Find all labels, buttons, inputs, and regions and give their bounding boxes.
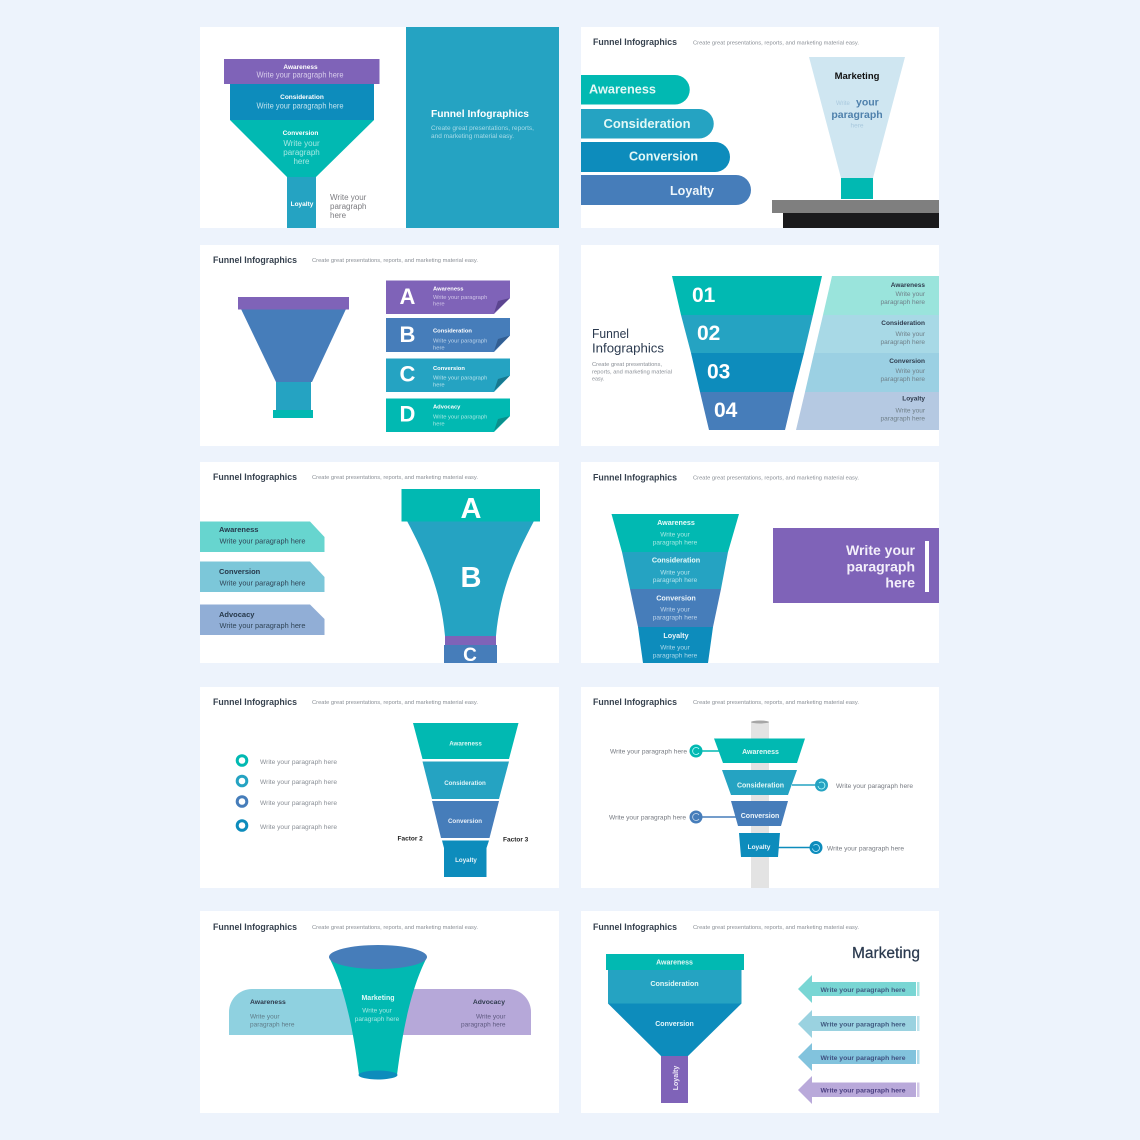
heading: Funnel Infographics <box>593 697 677 708</box>
funnel band 04 <box>700 392 794 430</box>
funnel band: loyalty: paragraph here <box>653 652 698 660</box>
callout: loyalty <box>778 841 904 854</box>
arrow 3 <box>798 1043 920 1071</box>
band: advocacy: Advocacy <box>473 999 505 1006</box>
arrow 1: Write your paragraph here <box>820 987 906 994</box>
card B <box>386 318 510 352</box>
funnel body: Write your <box>362 1008 393 1014</box>
label band: consideration <box>814 315 939 353</box>
label band: loyalty: paragraph here <box>881 416 925 422</box>
funnel band 04: 04 <box>714 399 738 422</box>
funnel tier: consideration <box>608 970 742 1004</box>
funnel band: loyalty: Write your <box>660 644 691 652</box>
heading <box>213 697 478 708</box>
card D: D <box>400 402 415 426</box>
panel: slide 3 funnel with ribbon cards <box>200 245 559 446</box>
funnel tier: consideration: Consideration <box>280 94 324 101</box>
spotlight funnel: paragraph <box>831 109 883 121</box>
heading <box>213 922 478 933</box>
card A <box>386 280 510 314</box>
funnel tier: conversion: Conversion <box>655 1021 694 1028</box>
funnel tier: awareness <box>606 954 744 970</box>
funnel band: conversion: paragraph here <box>653 614 698 622</box>
spotlight funnel: here <box>850 122 864 130</box>
title: marketing: Marketing <box>852 945 920 962</box>
band: awareness: Write your <box>250 1014 280 1020</box>
panel: slide 6 funnel with purple callout <box>581 462 939 663</box>
funnel base C: C <box>463 645 477 666</box>
funnel tier: consideration: Write your paragraph here <box>256 102 344 110</box>
side title panel <box>406 27 559 228</box>
pill: loyalty: Loyalty <box>670 183 715 198</box>
arrow 4 <box>798 1076 920 1104</box>
label band: consideration: Consideration <box>881 320 925 327</box>
funnel band 02 <box>681 315 813 353</box>
arrow 3: Write your paragraph here <box>820 1055 906 1062</box>
card C: C <box>400 362 416 386</box>
text block: loyalty note <box>330 193 367 220</box>
card D: Write your paragraph <box>433 414 487 420</box>
funnel tier: loyalty <box>287 177 316 228</box>
text block: loyalty note: Write your <box>330 193 367 202</box>
label band: consideration: Write your <box>896 331 926 338</box>
funnel tier: awareness: Awareness <box>449 740 482 748</box>
label band: conversion <box>805 353 939 392</box>
card A: here <box>433 302 445 308</box>
funnel tier: awareness: Write your paragraph here <box>256 70 344 80</box>
heading: Funnel Infographics <box>213 697 297 708</box>
funnel tier: consideration: Consideration <box>444 780 486 787</box>
pole <box>751 720 769 888</box>
callout: consideration <box>792 778 913 792</box>
spotlight funnel <box>809 57 905 178</box>
heading: Create great presentations, reports, and marketing material easy. <box>693 40 859 46</box>
tag: conversion: Write your paragraph here <box>220 580 306 588</box>
arrow 2 <box>798 1010 920 1038</box>
panel: slide 7 bullets and segmented funnel <box>200 687 559 888</box>
funnel band: conversion <box>630 589 721 627</box>
heading <box>593 697 859 708</box>
label band: awareness: Awareness <box>891 282 925 289</box>
bullet list: Write your paragraph here <box>260 824 337 831</box>
tag: awareness: Write your paragraph here <box>220 538 306 546</box>
callout: loyalty: Write your paragraph here <box>827 846 904 852</box>
teal funnel base <box>841 178 873 199</box>
heading: Funnel Infographics <box>213 255 297 266</box>
tier: conversion <box>731 801 788 826</box>
funnel band: conversion: Conversion <box>656 594 696 602</box>
bullet list: Write your paragraph here <box>260 759 337 766</box>
band: advocacy <box>400 989 531 1035</box>
card B: B <box>400 322 415 347</box>
card A: Write your paragraph <box>433 295 487 301</box>
arrow 4: Write your paragraph here <box>820 1088 906 1094</box>
label: factor 3: Factor 3 <box>503 836 529 844</box>
panel: slide 1 funnel with side title <box>200 27 559 228</box>
funnel tier: loyalty: Loyalty <box>673 1066 680 1090</box>
heading block: Create great presentations, <box>592 362 662 368</box>
pill: loyalty <box>581 175 751 205</box>
label band: conversion: Conversion <box>889 358 925 365</box>
card B: Write your paragraph <box>433 338 487 344</box>
funnel band 01: 01 <box>692 284 716 307</box>
heading: Create great presentations, reports, and marketing material easy. <box>693 476 859 482</box>
heading block: reports, and marketing material <box>592 370 672 376</box>
heading: Create great presentations, reports, and marketing material easy. <box>312 475 478 481</box>
purple callout: here <box>885 574 915 590</box>
heading block: Infographics <box>592 340 665 356</box>
tier: loyalty <box>739 833 780 857</box>
heading <box>213 255 478 266</box>
arrow 1 <box>798 975 920 1003</box>
card A: A <box>400 284 416 309</box>
tag: advocacy: Write your paragraph here <box>220 623 306 630</box>
tier: awareness: Awareness <box>742 749 779 756</box>
pill: conversion <box>581 142 730 172</box>
card B: Consideration <box>433 328 472 334</box>
funnel tier: conversion <box>608 1004 742 1056</box>
funnel top A: A <box>461 493 482 525</box>
funnel band: conversion: Write your <box>660 606 691 614</box>
tag: awareness: Awareness <box>219 525 258 534</box>
funnel bottom opening <box>358 1070 398 1080</box>
label band: awareness: paragraph here <box>881 299 925 306</box>
funnel band 03: 03 <box>707 360 730 384</box>
funnel band: awareness: paragraph here <box>653 540 698 546</box>
label band: conversion: paragraph here <box>881 376 925 383</box>
funnel band: awareness: Awareness <box>657 518 695 527</box>
funnel body <box>329 957 427 1075</box>
card C: Write your paragraph <box>433 376 487 382</box>
heading: Create great presentations, reports, and marketing material easy. <box>312 258 478 264</box>
heading: Funnel Infographics <box>593 37 677 48</box>
spotlight funnel: Write <box>836 101 851 107</box>
purple callout <box>773 528 939 603</box>
heading block <box>592 326 672 382</box>
label band: conversion: Write your <box>896 368 926 375</box>
callout: awareness <box>610 744 722 758</box>
funnel band: loyalty <box>638 627 713 663</box>
heading <box>213 472 478 483</box>
callout: awareness: Write your paragraph here <box>610 748 687 756</box>
heading: Funnel Infographics <box>593 922 677 933</box>
funnel band: awareness <box>612 514 739 552</box>
tag: awareness <box>200 522 324 552</box>
arrow 2: Write your paragraph here <box>820 1022 906 1028</box>
funnel band: consideration: paragraph here <box>653 577 698 584</box>
funnel band 03 <box>691 353 804 392</box>
funnel tier: conversion: Conversion <box>448 818 482 825</box>
funnel band 01 <box>672 276 822 315</box>
label band: loyalty: Loyalty <box>902 396 925 402</box>
spotlight funnel: your <box>856 96 879 108</box>
funnel body: paragraph here <box>355 1016 400 1023</box>
bullet list: Write your paragraph here <box>260 779 337 786</box>
funnel tier: loyalty: Loyalty <box>291 201 314 208</box>
heading: Funnel Infographics <box>213 922 297 933</box>
card D: here <box>433 422 445 428</box>
spotlight funnel: Marketing <box>835 71 880 82</box>
funnel band: consideration: Write your <box>660 570 691 576</box>
funnel tier: conversion <box>432 801 499 838</box>
funnel tier: awareness: Awareness <box>656 960 693 966</box>
funnel band 02: 02 <box>697 322 720 345</box>
card C: here <box>433 382 445 388</box>
purple callout: paragraph <box>847 558 915 574</box>
card D: Advocacy <box>433 404 461 410</box>
pill: consideration: Consideration <box>604 116 691 131</box>
funnel band: loyalty: Loyalty <box>663 631 689 640</box>
card C <box>386 358 510 392</box>
funnel tier: consideration: Consideration <box>650 979 699 988</box>
tier: consideration: Consideration <box>737 782 784 790</box>
card A: Awareness <box>433 286 464 292</box>
tag: advocacy <box>200 604 324 635</box>
tag: conversion <box>200 562 324 592</box>
label band: awareness <box>823 276 939 315</box>
text block: loyalty note: here <box>330 211 347 220</box>
black platform <box>783 213 939 228</box>
funnel band: consideration: Consideration <box>652 556 700 564</box>
funnel tier: loyalty <box>661 1056 688 1103</box>
funnel tier: awareness <box>413 723 518 759</box>
callout: conversion: Write your paragraph here <box>609 814 686 822</box>
label band: consideration: paragraph here <box>881 339 925 346</box>
purple callout: Write your <box>846 542 916 558</box>
tag: conversion: Conversion <box>219 567 261 576</box>
funnel tier: awareness: Awareness <box>283 64 318 71</box>
tier: awareness <box>714 738 805 763</box>
label band: awareness: Write your <box>896 291 926 298</box>
side title panel: Funnel Infographics <box>431 109 529 120</box>
card C: Conversion <box>433 366 465 372</box>
funnel tier: conversion: Conversion <box>283 130 318 137</box>
tag: advocacy: Advocacy <box>219 610 255 619</box>
funnel tier: loyalty <box>442 840 489 877</box>
panel: slide 8 funnel on pole with callouts <box>581 687 939 888</box>
heading: Create great presentations, reports, and marketing material easy. <box>312 700 478 706</box>
heading: Funnel Infographics <box>593 472 677 484</box>
label band: loyalty: Write your <box>896 408 926 414</box>
tier: loyalty: Loyalty <box>748 844 771 851</box>
callout: conversion <box>609 810 736 824</box>
grey platform <box>772 200 939 213</box>
tier: conversion: Conversion <box>741 813 779 820</box>
funnel tier: conversion: here <box>293 157 310 166</box>
heading: Create great presentations, reports, and marketing material easy. <box>693 700 859 706</box>
pill: awareness: Awareness <box>589 82 656 96</box>
band: awareness: paragraph here <box>250 1022 295 1028</box>
heading: Create great presentations, reports, and marketing material easy. <box>693 925 859 931</box>
panel: slide 2 stacked pills and spotlight funnel <box>581 27 939 228</box>
bullet list: Write your paragraph here <box>260 800 337 807</box>
card B: here <box>433 346 445 352</box>
tier: consideration <box>722 770 797 795</box>
funnel body: Marketing <box>361 995 395 1002</box>
heading: Create great presentations, reports, and marketing material easy. <box>312 925 478 931</box>
funnel tier: conversion: Write your <box>283 139 320 148</box>
bullet list <box>237 756 337 831</box>
heading <box>593 37 859 48</box>
panel: slide 9 3D funnel over band <box>200 911 559 1113</box>
band: advocacy: Write your <box>476 1014 506 1020</box>
heading block: Funnel <box>592 326 629 341</box>
funnel purple neck <box>445 636 496 645</box>
heading: Funnel Infographics <box>213 472 297 483</box>
funnel top A <box>402 489 540 525</box>
heading block: easy. <box>592 376 604 382</box>
curved funnel segment B: B <box>461 562 481 594</box>
band: advocacy: paragraph here <box>461 1022 506 1028</box>
label band: loyalty <box>796 392 939 430</box>
side title panel: Create great presentations, reports, <box>431 126 534 132</box>
funnel tier: conversion: paragraph <box>283 148 320 157</box>
panel: slide 5 curved funnel <box>200 462 559 666</box>
band: awareness: Awareness <box>250 999 286 1006</box>
pill: awareness <box>581 75 690 104</box>
heading <box>593 922 859 933</box>
pill: conversion: Conversion <box>629 148 698 164</box>
funnel tier: consideration <box>422 762 509 799</box>
curved funnel segment B <box>407 521 534 636</box>
band: awareness <box>229 989 360 1035</box>
funnel illustration <box>238 297 349 418</box>
panel: slide 4 numbered funnel <box>581 245 939 446</box>
funnel tier: consideration <box>230 84 374 120</box>
callout: consideration: Write your paragraph here <box>836 783 913 790</box>
panel: slide 10 funnel with arrows <box>581 911 939 1113</box>
funnel band: awareness: Write your <box>660 532 691 538</box>
funnel band: consideration <box>622 552 728 589</box>
side title panel: and marketing material easy. <box>431 134 514 140</box>
funnel tier: conversion <box>230 120 374 177</box>
funnel tier: awareness <box>224 59 380 84</box>
funnel tier: loyalty: Loyalty <box>455 857 477 864</box>
card D <box>386 398 510 432</box>
pill: consideration <box>581 109 714 138</box>
text block: loyalty note: paragraph <box>330 202 366 211</box>
funnel top opening <box>329 945 427 969</box>
heading <box>593 472 859 484</box>
funnel base C <box>444 645 497 666</box>
label: factor 2: Factor 2 <box>398 836 423 842</box>
